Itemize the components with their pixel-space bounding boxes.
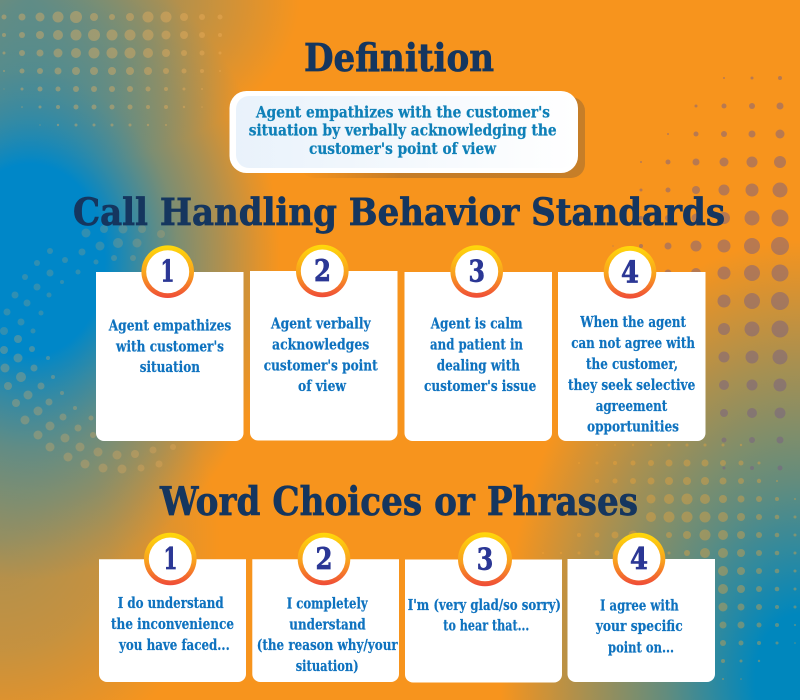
standard 1 text xyxy=(108,318,231,376)
badge 1: 1 xyxy=(160,255,174,290)
panel: standard 3 xyxy=(404,245,552,441)
phrase badge 3: 3 xyxy=(477,542,493,577)
badge 4 xyxy=(604,246,656,299)
badge 2: 2 xyxy=(314,254,331,289)
panel: standard 2 xyxy=(250,245,398,440)
phrase 1 text: the inconvenience xyxy=(111,616,234,633)
phrase 2 text xyxy=(257,596,398,675)
phrase 1 text: you have faced... xyxy=(118,637,230,654)
phrase 4 text: I agree with xyxy=(600,597,679,614)
phrase badge 2: 2 xyxy=(316,542,332,577)
definition text: customer's point of view xyxy=(309,139,497,158)
standard 4 text: When the agent xyxy=(579,314,686,331)
standard 2 text: Agent verbally xyxy=(270,315,371,332)
badge 3: 3 xyxy=(468,254,485,290)
heading: Word Choices or Phrases: Word Choices or Phrases xyxy=(159,479,638,525)
panel: standard 4 xyxy=(558,246,706,441)
standard 4 text: agreement xyxy=(596,398,668,415)
definition text: situation by verbally acknowledging the xyxy=(249,121,557,140)
standard 4 text: opportunities xyxy=(587,419,679,436)
phrase 2 text: (the reason why/your xyxy=(257,637,398,654)
standard 3 text: customer's issue xyxy=(424,378,536,395)
phrase 3 text: to hear that... xyxy=(443,618,529,635)
standard 4 text: they seek selective xyxy=(568,377,695,394)
phrase 1 text xyxy=(111,595,234,654)
phrase 2 text: understand xyxy=(289,616,366,633)
halftone dots: lower right xyxy=(542,444,796,680)
phrase badge 1: 1 xyxy=(164,542,178,577)
halftone dots: top right xyxy=(612,76,789,470)
badge 4: 4 xyxy=(621,255,639,290)
standard 3 text: Agent is calm xyxy=(430,315,523,332)
phrase 1 text: I do understand xyxy=(118,595,224,612)
phrase 3 text: I'm (very glad/so sorry) xyxy=(408,597,561,614)
phrase 4 text xyxy=(595,597,683,657)
standard 1 text: situation xyxy=(140,359,200,376)
standard 4 text xyxy=(568,314,695,436)
badge 3 xyxy=(450,245,503,298)
halftone dots: lower left arc xyxy=(0,335,176,474)
panel: phrase 1 xyxy=(99,533,246,682)
standard 2 text xyxy=(264,315,378,395)
phrase 4 text: your specific xyxy=(595,618,683,635)
phrase badge 4 xyxy=(613,533,665,585)
badge 2 xyxy=(296,245,349,297)
halftone dots: top left xyxy=(2,11,222,126)
phrase 2 text: I completely xyxy=(287,596,368,613)
panel: phrase 4 xyxy=(568,533,715,682)
panel: phrase 2 xyxy=(252,533,399,682)
standard 3 text xyxy=(424,315,536,395)
phrase badge 3 xyxy=(458,532,512,586)
definition text xyxy=(249,102,557,158)
standard 1 text: with customer's xyxy=(115,338,224,355)
standard 2 text: customer's point xyxy=(264,357,378,374)
badge 1 xyxy=(141,245,194,298)
phrase 2 text: situation) xyxy=(296,658,359,675)
standard 2 text: acknowledges xyxy=(272,337,369,354)
standard 3 text: dealing with xyxy=(437,357,520,374)
panel: standard 1 xyxy=(96,245,244,441)
standard 3 text: and patient in xyxy=(430,336,523,353)
standard 4 text: can not agree with xyxy=(571,335,695,352)
heading: Definition: Definition xyxy=(304,35,494,80)
halftone dots: lower left xyxy=(0,224,165,335)
phrase 3 text xyxy=(408,597,561,635)
standard 2 text: of view xyxy=(298,378,346,395)
standard 4 text: the customer, xyxy=(586,356,678,373)
definition text: Agent empathizes with the customer's xyxy=(255,102,550,121)
panel: phrase 3 xyxy=(405,532,562,682)
phrase badge 1 xyxy=(144,533,197,585)
standard 1 text: Agent empathizes xyxy=(108,318,231,335)
panel: definition callout xyxy=(230,91,585,178)
phrase 4 text: point on... xyxy=(608,640,674,657)
heading: Call Handling Behavior Standards: Call Handling Behavior Standards xyxy=(73,190,725,234)
phrase badge 2 xyxy=(298,533,350,585)
phrase badge 4: 4 xyxy=(630,542,648,577)
